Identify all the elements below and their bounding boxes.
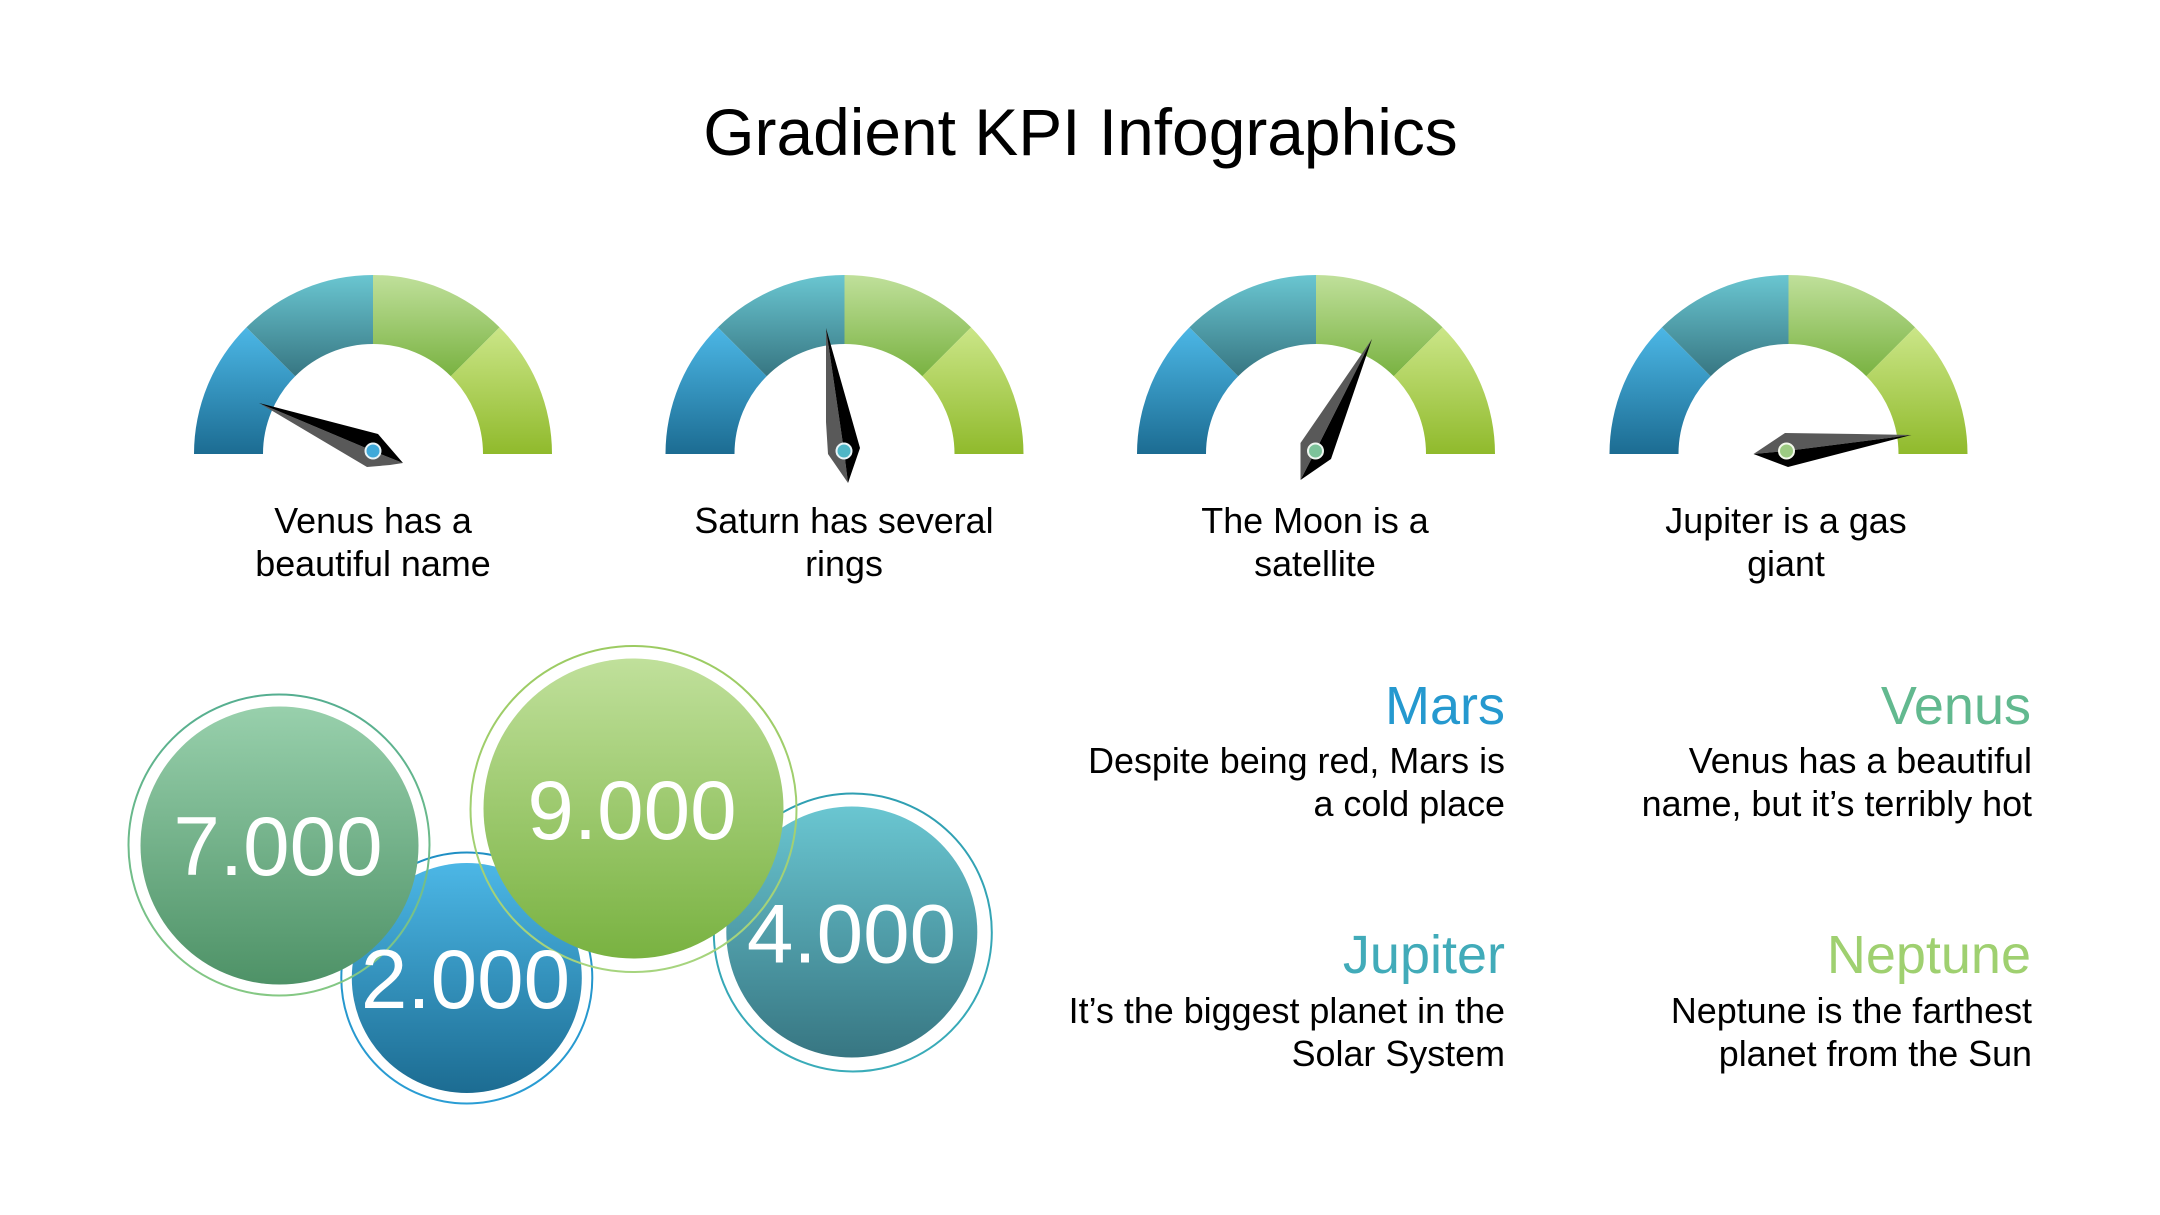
needle: Venus — [259, 403, 403, 467]
heading: Jupiter: Jupiter — [1343, 925, 1505, 985]
label: Jupiter: giant — [1747, 544, 1825, 584]
text block: Venus — [1642, 676, 2032, 824]
label: Saturn: rings — [805, 544, 883, 584]
description: Jupiter: It’s the biggest planet in the — [1069, 991, 1505, 1031]
gauge dial: Saturn — [666, 275, 1024, 454]
label: Saturn: Saturn has several — [694, 501, 994, 541]
gauge: Venus — [194, 275, 552, 584]
value: 2.000: 2.000 — [361, 932, 570, 1026]
gauge dial: Venus — [194, 275, 552, 454]
description: Venus: Venus has a beautiful — [1689, 741, 2032, 781]
gauge: Moon — [1137, 275, 1495, 584]
description: Jupiter: Solar System — [1292, 1034, 1505, 1074]
gauge dial: Moon — [1137, 275, 1495, 454]
gauge dial: Jupiter — [1610, 275, 1968, 454]
label: Venus: beautiful name — [255, 544, 491, 584]
heading: Venus: Venus — [1881, 676, 2031, 736]
description: Mars: a cold place — [1313, 784, 1505, 824]
label: Venus: Venus has a — [274, 501, 472, 541]
gauge: Jupiter — [1610, 275, 1968, 584]
heading: Mars: Mars — [1385, 676, 1505, 736]
text block: Neptune — [1671, 925, 2032, 1074]
label: Jupiter: Jupiter is a gas — [1665, 501, 1907, 541]
label: Moon: satellite — [1254, 544, 1376, 584]
needle: Jupiter — [1754, 433, 1912, 467]
circle: 2.000 — [341, 852, 592, 1104]
value: 9.000: 9.000 — [527, 763, 737, 857]
text block: Jupiter — [1069, 925, 1505, 1074]
circle: 4.000 — [714, 794, 992, 1072]
circle: 7.000 — [128, 694, 430, 996]
text block: Mars — [1088, 676, 1505, 824]
heading: Neptune: Neptune — [1827, 925, 2031, 985]
circle: 9.000 — [470, 646, 796, 972]
description: Neptune: Neptune is the farthest — [1671, 991, 2032, 1031]
title: Gradient KPI Infographics — [703, 95, 1458, 169]
value: 4.000: 4.000 — [747, 886, 956, 980]
description: Neptune: planet from the Sun — [1719, 1034, 2032, 1074]
label: Moon: The Moon is a — [1201, 501, 1429, 541]
value: 7.000: 7.000 — [173, 799, 383, 893]
description: Venus: name, but it’s terribly hot — [1642, 784, 2032, 824]
description: Mars: Despite being red, Mars is — [1088, 741, 1505, 781]
gauge: Saturn — [666, 275, 1024, 584]
needle: Moon — [1300, 339, 1372, 480]
needle: Saturn — [826, 328, 860, 483]
